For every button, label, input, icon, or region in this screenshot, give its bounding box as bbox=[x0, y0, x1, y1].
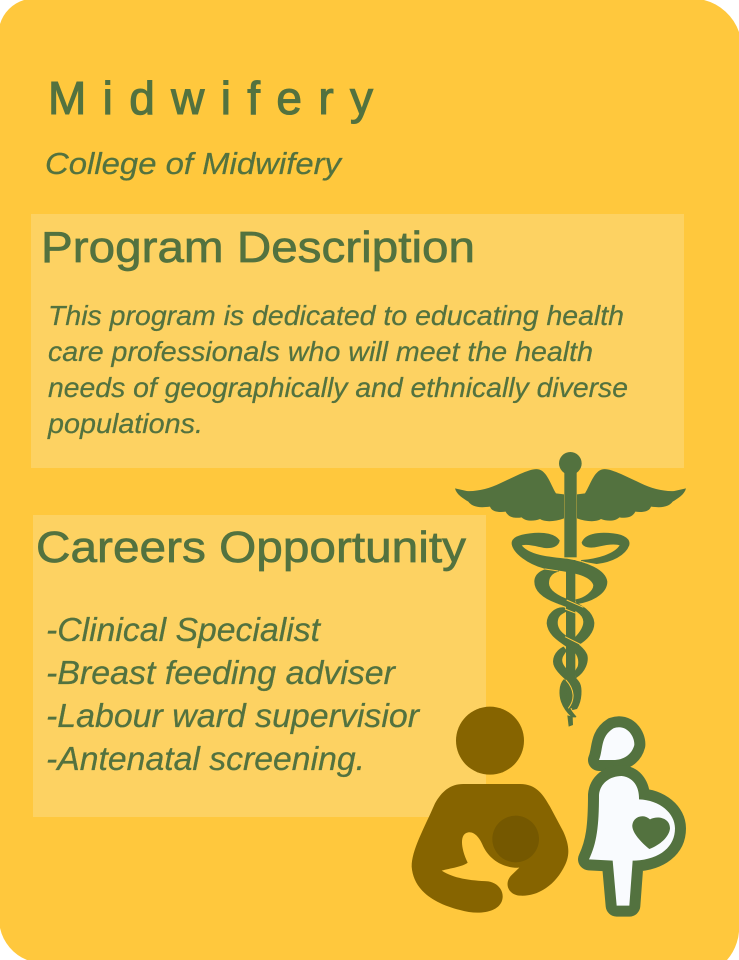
panel: careers opportunity bbox=[33, 515, 486, 817]
icon: breastfeeding mother bbox=[412, 707, 568, 913]
title: Midwifery bbox=[48, 72, 373, 124]
mother body bbox=[412, 784, 568, 913]
head bbox=[599, 727, 634, 760]
icon: caduceus bbox=[455, 452, 686, 727]
text block: description: This program is dedicated to educating health bbox=[48, 300, 624, 331]
list: careers: -Breast feeding adviser bbox=[46, 654, 397, 691]
heading: careers opportunity: Careers Opportunity bbox=[36, 523, 466, 572]
mother head bbox=[456, 707, 524, 775]
text block: description: populations. bbox=[47, 408, 203, 439]
text block: description: needs of geographically and ethnically diverse bbox=[48, 372, 628, 403]
subtitle: College of Midwifery bbox=[45, 146, 344, 181]
heart bbox=[632, 816, 670, 849]
list: careers bbox=[46, 611, 421, 777]
text block: description: care professionals who will meet the health bbox=[48, 336, 593, 367]
icon: pregnant woman bbox=[589, 727, 675, 906]
body bbox=[589, 776, 675, 906]
baby head bbox=[492, 816, 539, 862]
list: careers: -Labour ward supervisior bbox=[46, 697, 421, 734]
list: careers: -Clinical Specialist bbox=[46, 611, 322, 648]
list: careers: -Antenatal screening. bbox=[46, 740, 365, 777]
heading: program description: Program Description bbox=[41, 223, 475, 272]
text block: description bbox=[47, 300, 628, 439]
panel: program description bbox=[31, 214, 684, 468]
